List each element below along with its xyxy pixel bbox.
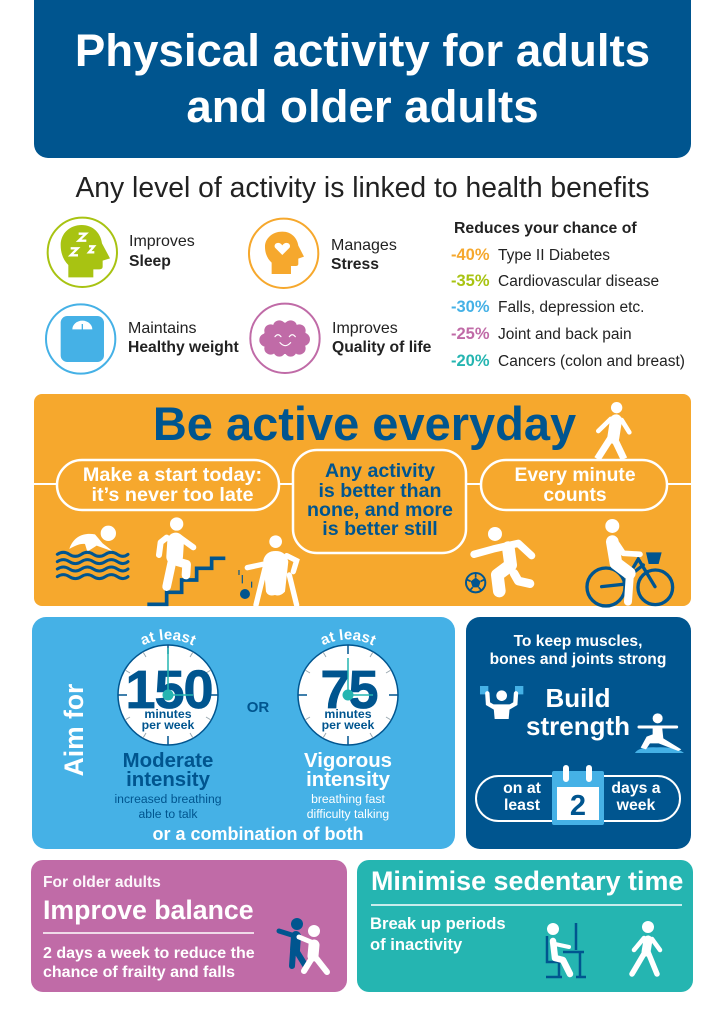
row: falls, depression: -30% <box>451 298 490 316</box>
clock hands <box>342 658 373 700</box>
subtitle: Any level of activity is linked to health benefits <box>75 171 650 203</box>
text: days a week: chance of frailty and falls <box>43 964 235 981</box>
minutes per week <box>142 707 194 732</box>
heading: build strength <box>526 683 630 741</box>
clock: 75 minutes <box>297 629 399 746</box>
text: improves quality of life: Improves <box>332 320 398 337</box>
text: moderate intensity: Moderate <box>123 750 213 772</box>
icon: person at desk <box>546 923 586 977</box>
text: vigorous intensity: Vigorous <box>304 750 392 772</box>
panel: health benefits <box>46 218 432 374</box>
clock hands <box>162 648 193 700</box>
icon: two people balancing <box>279 918 327 972</box>
title text: Physical activity for adults <box>75 25 650 76</box>
icon: walking person <box>597 402 629 459</box>
text: improves sleep: Sleep <box>129 253 171 270</box>
text: moderate intensity: able to talk <box>139 807 198 821</box>
pill: every minute counts: counts <box>543 485 607 506</box>
number 150: 150 <box>125 660 213 720</box>
text: maintains healthy weight <box>128 320 239 356</box>
row: cardiovascular disease: Cardiovascular disease <box>498 273 659 290</box>
pill: make a start today <box>57 460 279 510</box>
icon: sleeping head <box>48 218 117 287</box>
number 75: 75 <box>320 660 377 720</box>
pill: every minute counts: Every minute <box>514 465 636 486</box>
icon: cyclist <box>587 519 673 606</box>
row: cancers: Cancers (colon and breast) <box>498 353 685 370</box>
pill: on at least 2 days a week: on at <box>503 780 542 797</box>
minutes per week: minutes <box>144 707 192 721</box>
title text: and older adults <box>186 81 539 132</box>
heading: reduces your chance: Reduces your chance of <box>454 220 637 237</box>
heading: improve balance: Improve balance <box>43 895 254 925</box>
row: type II diabetes <box>451 246 610 264</box>
text: break up periods <box>370 914 506 954</box>
pill: every minute counts <box>481 460 667 510</box>
row: type II diabetes: Type II Diabetes <box>498 247 610 264</box>
pill: make a start today: Make a start today: <box>83 464 262 486</box>
row: joint and back pain: Joint and back pain <box>498 326 632 343</box>
text: break up periods: Break up periods <box>370 914 506 933</box>
icon: smiling cloud <box>250 304 320 373</box>
text: days a week: 2 days a week to reduce the <box>43 945 255 962</box>
text: improves sleep <box>129 233 195 270</box>
row: type II diabetes: -40% <box>451 246 490 264</box>
icon: head with heart <box>249 219 318 288</box>
panel: improve balance <box>31 860 347 992</box>
panel: reduces your chance of <box>451 220 685 370</box>
text: improves quality of life: Quality of life <box>332 339 432 356</box>
clock: 150 minutes <box>117 629 219 746</box>
minutes per week <box>322 707 374 732</box>
minutes per week: per week <box>322 718 374 732</box>
box: any activity: Any activity <box>325 460 435 482</box>
row: joint and back pain <box>451 325 632 343</box>
icon: walking figure <box>632 921 660 974</box>
text: moderate intensity: increased breathing <box>114 792 222 806</box>
box: any activity: none, and more <box>307 499 453 521</box>
heading: minimise sedentary time: Minimise sedentary time <box>371 866 683 896</box>
text: combination: or a combination of both <box>153 824 363 844</box>
icon: person with walking frame and ball <box>239 535 297 605</box>
label: for older adults: For older adults <box>43 874 161 891</box>
label: or: OR <box>247 699 269 716</box>
text: break up periods: of inactivity <box>370 935 463 954</box>
icon: person climbing stairs <box>147 517 225 604</box>
panel: build strength <box>466 617 691 849</box>
text: vigorous intensity <box>304 750 392 821</box>
text: improves quality of life <box>332 320 432 356</box>
box: any activity: is better still <box>322 518 438 540</box>
text: keep strong <box>490 633 666 668</box>
icon: calendar: 2 <box>570 790 586 822</box>
text: days a week <box>43 945 255 981</box>
box: any activity <box>293 450 466 553</box>
pill: on at least 2 days a week: week <box>616 797 656 814</box>
clock ticks <box>118 645 218 745</box>
clock ticks <box>298 645 398 745</box>
text: manages stress <box>331 237 397 273</box>
row: falls, depression: Falls, depression etc. <box>498 299 644 316</box>
benefit: healthy weight <box>46 304 239 374</box>
text: moderate intensity: intensity <box>126 769 211 791</box>
text: vigorous intensity: difficulty talking <box>307 807 389 821</box>
text: vigorous intensity: intensity <box>306 769 391 791</box>
row: cancers: -20% <box>451 352 490 370</box>
text: keep strong: To keep muscles, <box>514 633 642 650</box>
text: manages stress: Manages <box>331 237 397 254</box>
row: cardiovascular disease: -35% <box>451 272 490 290</box>
minutes per week: minutes <box>324 707 372 721</box>
pill: on at least 2 days a week: days a <box>611 780 661 797</box>
minutes per week: per week <box>142 718 194 732</box>
pill: make a start today: it’s never too late <box>92 484 253 506</box>
pill: on at least 2 days a week: least <box>504 797 541 814</box>
at least arc text: at least <box>141 629 196 646</box>
benefit: stress <box>249 219 397 288</box>
icon: weighing scale <box>46 304 115 374</box>
icon: person kicking football <box>466 527 532 592</box>
text: vigorous intensity: breathing fast <box>311 792 386 806</box>
heading: be active everyday: Be active everyday <box>153 397 576 450</box>
panel: title <box>34 0 691 158</box>
title text <box>75 25 650 132</box>
pill: on at least 2 days a week <box>476 768 680 825</box>
text: keep strong: bones and joints strong <box>490 651 666 668</box>
icon: calendar <box>552 768 604 825</box>
text: maintains healthy weight: Healthy weight <box>128 339 239 356</box>
text: improves sleep: Improves <box>129 233 195 250</box>
text: moderate intensity <box>114 750 222 821</box>
text: maintains healthy weight: Maintains <box>128 320 196 337</box>
heading: build strength: strength <box>526 711 630 741</box>
icon: swimmer <box>57 526 128 579</box>
benefit: quality of life <box>250 304 432 373</box>
icon: weightlifter <box>480 686 523 719</box>
panel: minimise sedentary time <box>357 860 693 992</box>
panel: be active everyday <box>34 394 691 606</box>
rotated label: aim for: Aim for <box>59 684 89 776</box>
at least arc text: at least <box>321 629 376 646</box>
text: manages stress: Stress <box>331 256 379 273</box>
benefit: sleep <box>48 218 195 287</box>
panel: aim for <box>32 617 455 849</box>
icon: yoga pose <box>635 713 684 753</box>
row: joint and back pain: -25% <box>451 325 490 343</box>
box: any activity: is better than <box>318 480 442 502</box>
heading: build strength: Build <box>546 683 610 713</box>
